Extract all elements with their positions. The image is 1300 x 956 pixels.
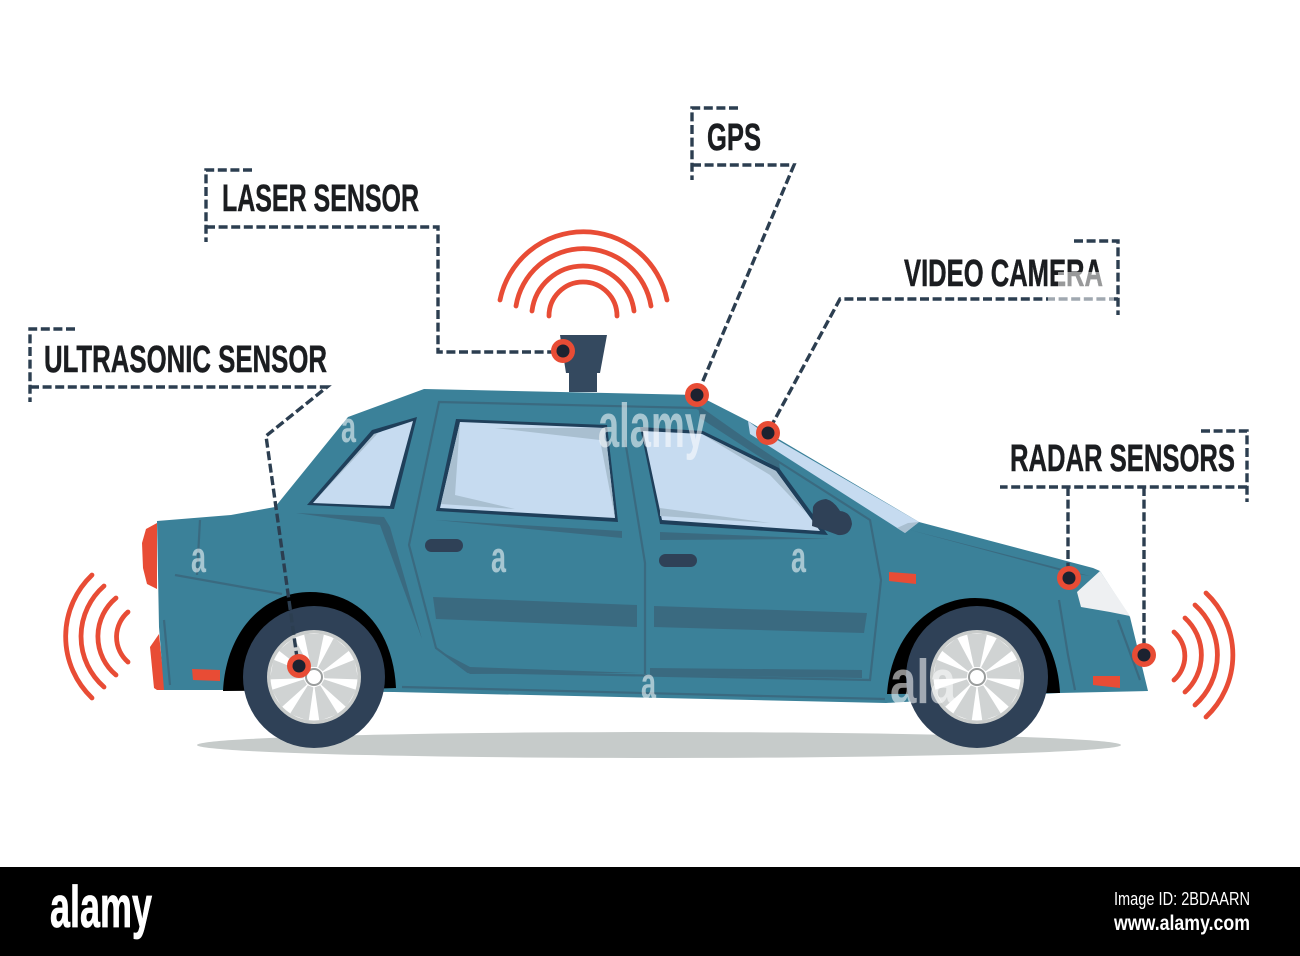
label: video camera: VIDEO CAMERA bbox=[904, 253, 1103, 295]
watermarks: a bbox=[491, 533, 506, 582]
footer image id: Image ID: 2BDAARN bbox=[1114, 889, 1250, 909]
line: GPS bbox=[692, 108, 794, 395]
watermarks: a bbox=[341, 403, 356, 452]
roof laser unit bbox=[560, 335, 607, 392]
windshield strip bbox=[748, 421, 919, 533]
signal arcs: roof bbox=[500, 232, 667, 316]
line: laser sensor bbox=[206, 170, 563, 352]
rear door window bbox=[436, 419, 618, 522]
label: ultrasonic sensor: ULTRASONIC SENSOR bbox=[44, 339, 327, 381]
watermarks: a bbox=[191, 533, 206, 582]
rear wheel bbox=[243, 606, 385, 748]
front door window bbox=[640, 427, 828, 535]
rear quarter window bbox=[307, 417, 417, 509]
ground shadow bbox=[197, 732, 1121, 758]
headlight bbox=[1077, 571, 1130, 616]
footer url: www.alamy.com bbox=[1113, 912, 1250, 935]
signal arcs: rear bbox=[66, 575, 128, 698]
watermarks bbox=[191, 272, 1114, 717]
line: ultrasonic sensor bbox=[30, 329, 327, 665]
rear tail lights bbox=[142, 523, 165, 690]
car body bbox=[157, 389, 1148, 703]
footer bar bbox=[0, 867, 1300, 956]
side markers bbox=[192, 572, 1120, 688]
door handles bbox=[425, 539, 697, 567]
watermarks: alamy bbox=[598, 392, 706, 461]
sensor dots bbox=[287, 339, 1156, 678]
footer logo: alamy bbox=[50, 875, 152, 940]
watermarks: a bbox=[641, 659, 656, 708]
side mirror bbox=[812, 499, 852, 535]
line: radar sensors bbox=[1000, 431, 1247, 655]
body shading lines bbox=[164, 402, 1140, 699]
watermarks: a bbox=[791, 533, 806, 582]
signal arcs: front bbox=[1174, 593, 1233, 717]
label: GPS: GPS bbox=[707, 117, 761, 159]
watermarks: ala bbox=[890, 648, 956, 717]
door creases bbox=[296, 405, 1090, 678]
wheel arches bbox=[223, 592, 396, 691]
car bbox=[142, 389, 1148, 748]
front wheel bbox=[906, 606, 1048, 748]
label: laser sensor: LASER SENSOR bbox=[222, 178, 419, 220]
line: video camera bbox=[768, 241, 1118, 432]
callout lines bbox=[30, 108, 1247, 665]
